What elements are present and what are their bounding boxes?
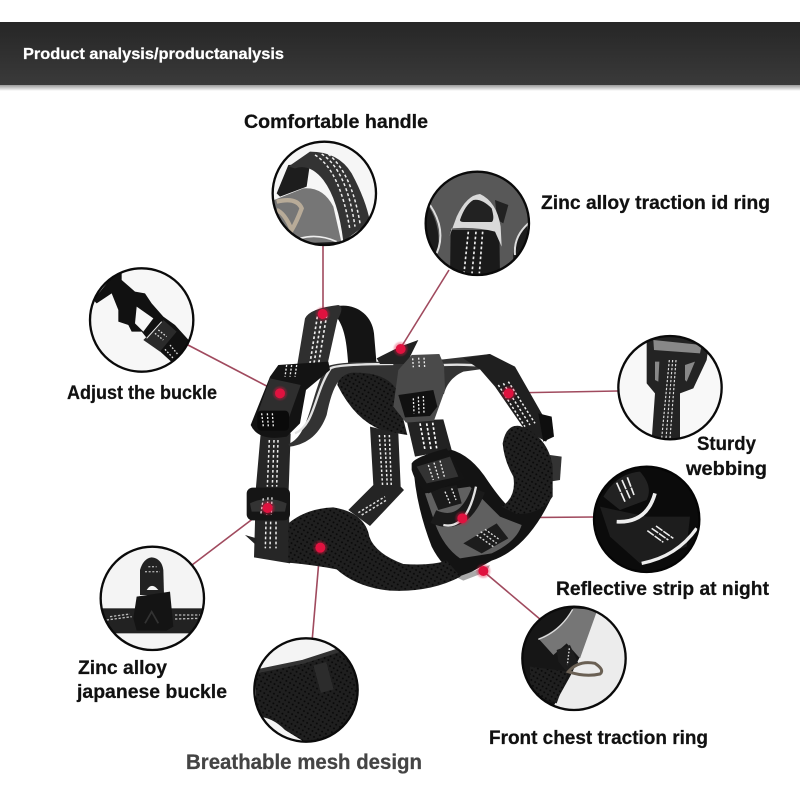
detail circle: sturdy webbing (617, 335, 723, 442)
label: sturdy webbing: webbing (685, 459, 767, 480)
connector lines (188, 246, 618, 642)
label: zinc alloy japanese buckle: Zinc alloy (78, 658, 167, 679)
right strap (463, 354, 562, 482)
rear vertical strap (348, 427, 404, 526)
detail circle: front chest ring (522, 607, 628, 713)
detail circle: comfortable handle (270, 140, 380, 247)
id ring (377, 340, 418, 364)
center quick release buckle (393, 354, 445, 423)
label: comfortable handle: Comfortable handle (244, 112, 428, 133)
label: zinc alloy japanese buckle (76, 658, 227, 703)
callout dots (261, 307, 516, 578)
detail circle: adjust buckle (87, 265, 197, 375)
label: front chest traction ring: Front chest traction ring (489, 728, 708, 749)
header title: Product analysis/productanalysis (23, 46, 284, 63)
upper left buckle (251, 362, 330, 438)
detail circle: breathable mesh (253, 638, 360, 745)
harness product photo (245, 305, 562, 591)
handle (297, 305, 377, 368)
label: zinc alloy traction id ring: Zinc alloy traction id ring (541, 193, 770, 214)
side mesh pad (502, 426, 553, 514)
label: breathable mesh design: Breathable mesh design (186, 751, 422, 774)
label: sturdy webbing (685, 434, 767, 480)
front chest pad (413, 449, 553, 581)
lower chest buckle (412, 448, 465, 493)
detail circle: japanese buckle (98, 545, 207, 653)
back mesh pad (337, 365, 407, 435)
label: adjust the buckle: Adjust the buckle (67, 383, 217, 404)
bottom mesh pad (288, 507, 461, 591)
detail circle: zinc alloy id ring (423, 170, 533, 277)
label: reflective strip at night: Reflective strip at night (556, 579, 770, 600)
left vertical strap (245, 433, 291, 563)
center strap (407, 419, 462, 510)
reflective gray trim and body band (288, 354, 500, 447)
detail circle: reflective strip (592, 465, 702, 575)
label: sturdy webbing: Sturdy (697, 434, 756, 455)
label: zinc alloy japanese buckle: japanese buckle (76, 682, 227, 703)
header band (0, 22, 800, 91)
